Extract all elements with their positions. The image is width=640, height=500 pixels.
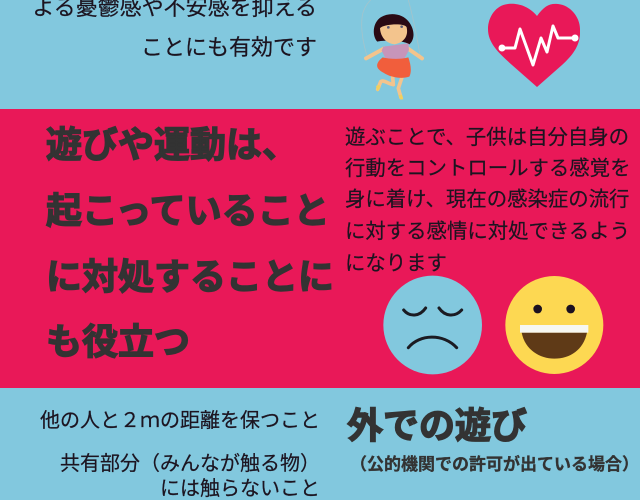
text: shared areas line 1: 共有部分（みんなが触る物） xyxy=(60,453,320,475)
heading: outdoor play: 外での遊び xyxy=(347,405,527,446)
text line 1: 遊ぶことで、子供は自分自身の xyxy=(345,127,629,149)
text: official permission note: （公的機関での許可が出ている場合） xyxy=(350,455,639,474)
text line 5: になります xyxy=(345,253,447,275)
text line 2: 行動をコントロールする感覚を xyxy=(345,158,630,180)
text line 3: 身に着け、現在の感染症の流行 xyxy=(345,189,629,211)
panel: bottom rules and outdoor play xyxy=(0,388,640,500)
icon: heart with pulse line xyxy=(488,4,580,87)
heading: play and exercise help xyxy=(46,124,334,362)
text: anxiety line 2: ことにも有効です xyxy=(141,35,317,60)
text line 4: に対する感情に対処できるよう xyxy=(345,221,630,243)
heading line 3: に対処することに xyxy=(46,256,334,297)
heading line 2: 起こっていること xyxy=(46,190,330,231)
text: keep 2m distance: 他の人と２ｍの距離を保つこと xyxy=(40,410,320,432)
icon: sad face xyxy=(383,276,482,374)
icon: laughing face xyxy=(505,276,604,374)
icon: girl skipping rope xyxy=(361,0,424,100)
panel: top benefits xyxy=(0,0,640,109)
panel: play helps coping xyxy=(0,109,640,388)
heading line 1: 遊びや運動は、 xyxy=(46,124,298,165)
heading line 4: も役立つ xyxy=(46,321,190,362)
text block: sense of control xyxy=(345,126,630,275)
text: shared areas line 2: には触らないこと xyxy=(160,478,320,500)
